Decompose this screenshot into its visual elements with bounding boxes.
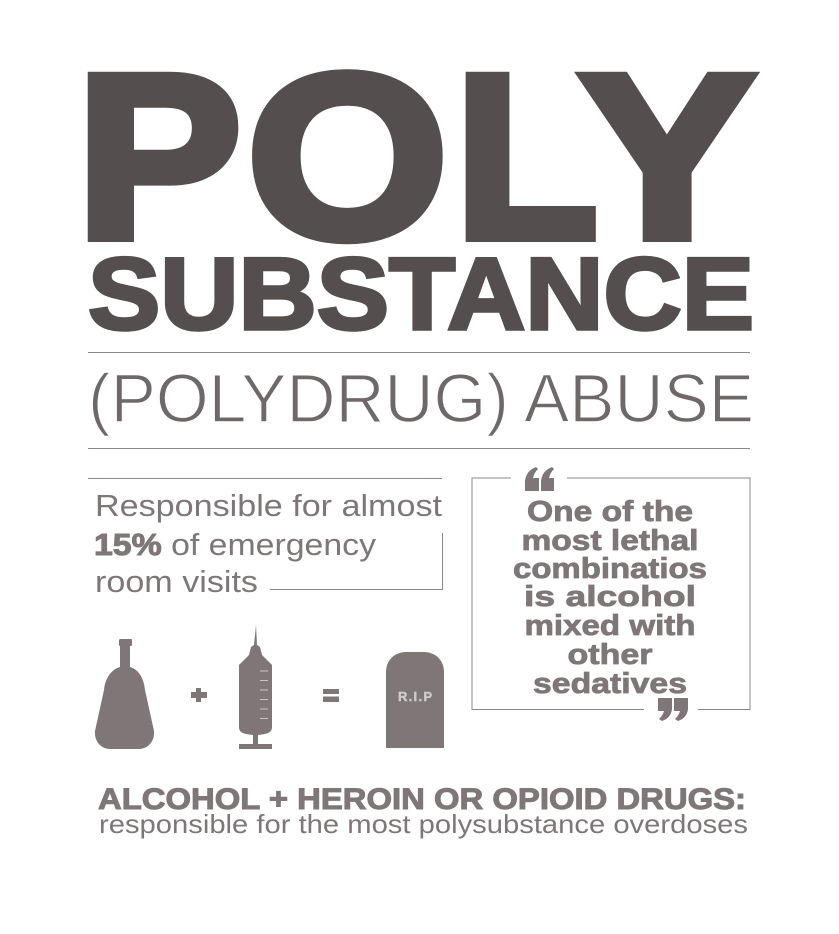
quote text: sedatives <box>533 668 687 700</box>
text: responsible for almost: Responsible for almost <box>95 488 442 523</box>
title: POLY: P <box>76 27 242 287</box>
text: room visits: room visits <box>95 564 258 599</box>
quote text: One of the <box>527 496 693 528</box>
quote text: most lethal <box>522 525 698 557</box>
quote text: mixed with <box>524 610 696 642</box>
title: POLY: L <box>455 27 598 287</box>
heading: alcohol + heroin or opioid drugs: ALCOHOL + HEROIN OR OPIOID DRUGS: <box>98 783 746 816</box>
quote text: is alcohol <box>524 581 696 613</box>
title: POLY <box>76 27 754 287</box>
quote text: combinatios <box>513 553 707 585</box>
panel: emergency room statistic <box>88 478 442 599</box>
title: SUBSTANCE: SUBSTANCE <box>88 237 754 351</box>
title: POLY: Y <box>580 27 754 287</box>
text: R.I.P: R.I.P <box>398 689 432 704</box>
icon: plus <box>191 688 207 702</box>
text: 15% of emergency: 15% of emergency <box>94 527 377 562</box>
icon: bottle <box>95 639 154 749</box>
panel: quote <box>472 467 750 721</box>
title: POLY: O <box>247 27 448 287</box>
subtitle: (POLYDRUG) ABUSE: (POLYDRUG) ABUSE <box>88 360 754 437</box>
icon: equals <box>323 689 339 702</box>
icon: syringe <box>239 625 272 749</box>
quote text <box>513 496 707 700</box>
text: responsible for the most polysubstance overdoses: responsible for the most polysubstance overdoses <box>99 809 748 839</box>
icon: tombstone <box>386 652 444 748</box>
quote text: other <box>568 639 652 671</box>
icon: opening quote mark <box>525 467 554 491</box>
icon: closing quote mark <box>658 698 688 721</box>
